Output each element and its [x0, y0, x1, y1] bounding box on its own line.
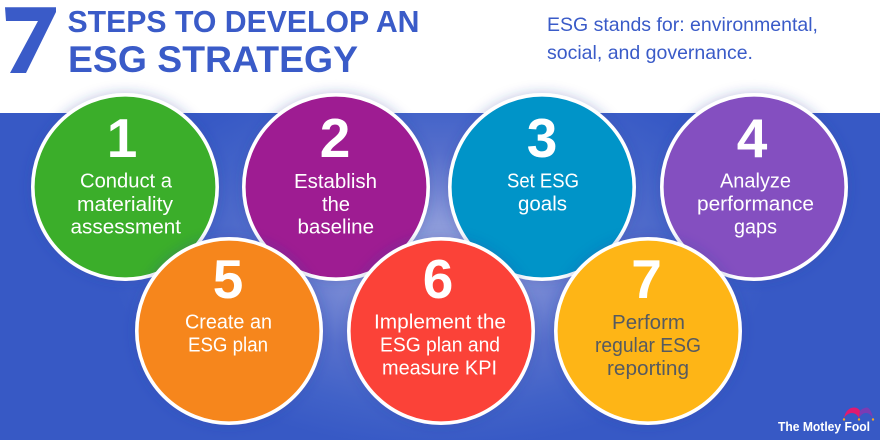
step 4 — [662, 95, 846, 279]
step 2: Establish — [294, 171, 377, 193]
step 4: Analyze — [720, 170, 791, 192]
step 6: 6 — [423, 248, 453, 310]
step 7 — [556, 239, 740, 423]
step 2: the — [322, 194, 350, 216]
step 4: gaps — [734, 216, 777, 238]
step 5 — [137, 239, 321, 423]
intro note — [547, 14, 818, 64]
step 5: Create an — [185, 312, 272, 334]
step 6 — [349, 239, 533, 423]
step 1: 1 — [107, 107, 137, 169]
icon: jester hat — [843, 408, 874, 421]
intro note: social, and governance. — [547, 42, 753, 64]
step 6: ESG plan and — [380, 334, 500, 356]
step 3 — [450, 95, 634, 279]
intro note: ESG stands for: environmental, — [547, 14, 818, 36]
step 4: 4 — [737, 107, 768, 169]
step 2: 2 — [320, 107, 350, 169]
step 1: materiality — [77, 194, 173, 216]
title line one: STEPS TO DEVELOP AN — [68, 4, 420, 39]
step 2 — [244, 95, 428, 279]
title line two: ESG STRATEGY — [68, 39, 358, 80]
step 1: Conduct a — [80, 170, 173, 192]
title — [5, 4, 420, 80]
step 2: baseline — [298, 216, 374, 238]
step 5: 5 — [213, 248, 243, 310]
logo: The Motley Fool: The Motley Fool — [778, 419, 870, 434]
step 3: 3 — [527, 107, 557, 169]
blue background band — [0, 113, 880, 440]
step 4: performance — [697, 194, 814, 216]
step 7: Perform — [612, 312, 685, 334]
step 5: ESG plan — [188, 334, 268, 356]
step 7: 7 — [631, 248, 662, 310]
step 6: Implement the — [374, 312, 506, 334]
logo: The Motley Fool — [778, 408, 874, 434]
step 3: Set ESG — [507, 170, 579, 192]
big numeral 7 — [5, 7, 56, 73]
step 1 — [33, 95, 217, 279]
step 6: measure KPI — [382, 358, 497, 380]
step 7: regular ESG — [595, 335, 701, 357]
step 1: assessment — [70, 216, 181, 238]
step 7: reporting — [607, 358, 689, 380]
step 3: goals — [518, 194, 567, 216]
